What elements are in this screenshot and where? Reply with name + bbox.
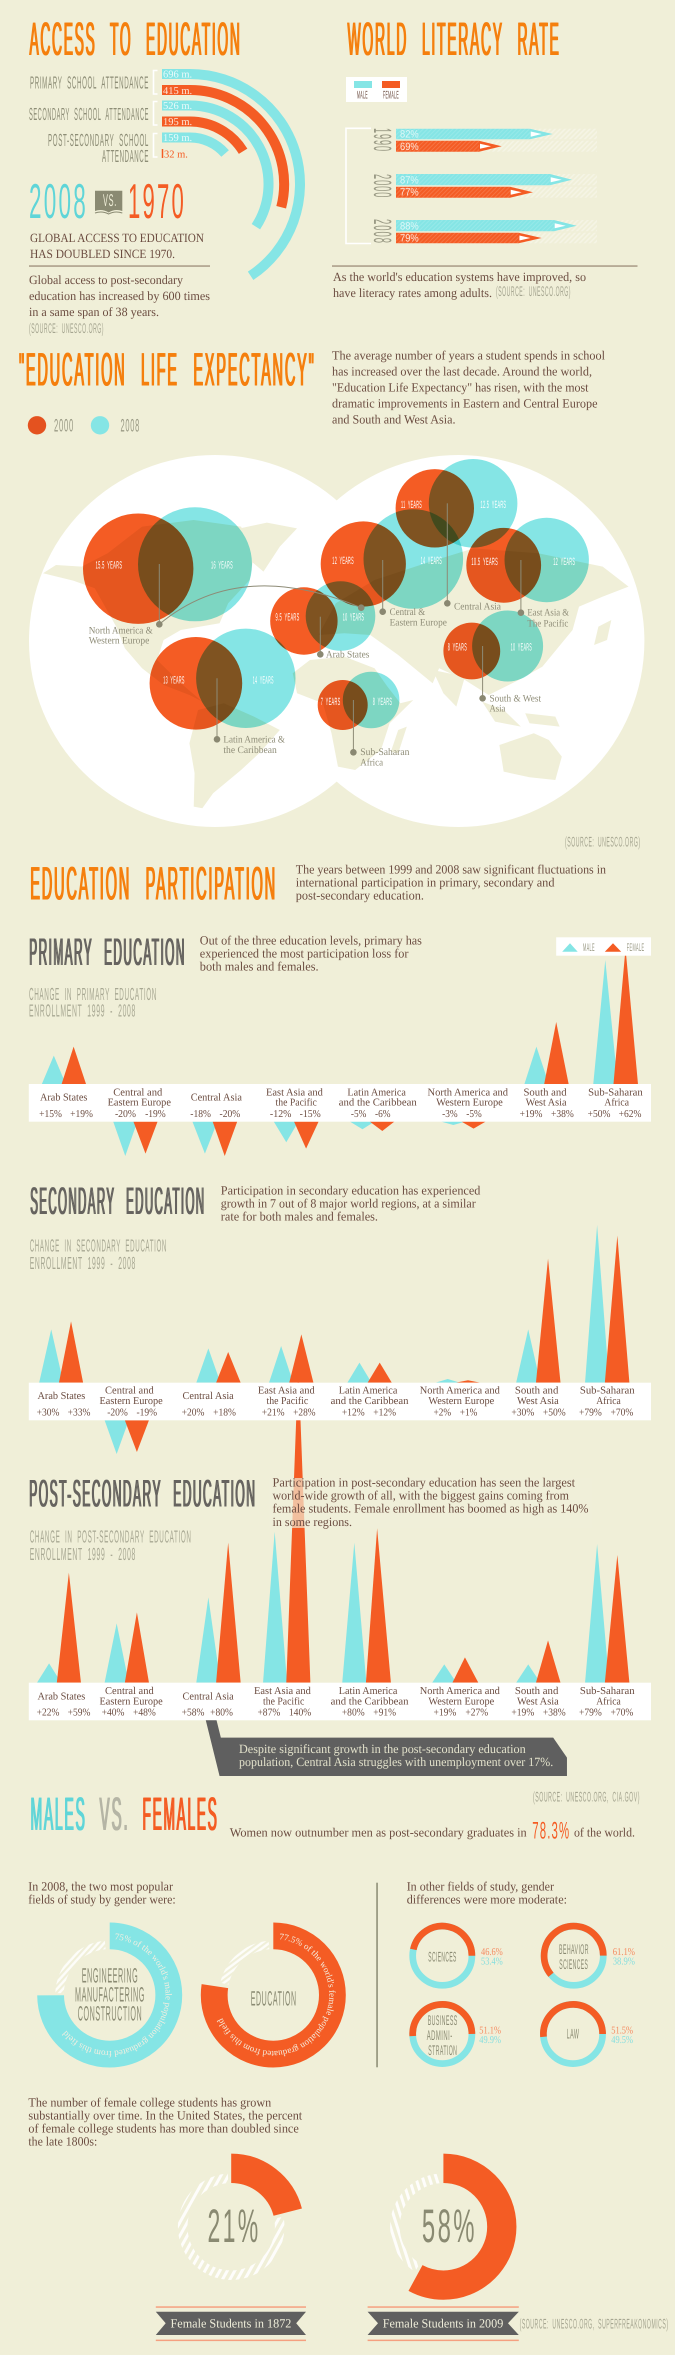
year labels [368,128,396,244]
region labels and values: Eastern Europe [99,1695,163,1707]
region labels and values: +27% [465,1706,488,1718]
region labels and values: -20% [115,1108,136,1119]
panel: education life expectancy: 12 YEARS [553,556,575,568]
title: VS. [99,1787,129,1840]
region labels: the Caribbean [223,745,277,756]
donut: business administration: STRATION [428,2042,457,2058]
region labels and values: +80% [342,1706,365,1718]
headline text [30,231,204,261]
panel: access to education: PRIMARY SCHOOL ATTENDANCE [30,73,149,93]
circle year values: 10.5 YEARS [471,556,498,568]
circle year values: 8 YEARS [448,642,467,654]
donut: behavior sciences: 38.9% [613,1957,635,1968]
intro text: and South and West Asia. [332,412,456,426]
chart legend [556,937,651,956]
callout: central asia unemployment: population, Central Asia struggles with unemployment over 17%. [239,1755,553,1769]
attendance labels [29,73,149,166]
female college students text: The number of female college students has grown [28,2096,272,2110]
intro left: fields of study by gender were: [28,1892,176,1906]
circle year values: 8 YEARS [373,696,392,708]
panel: secondary education: SECONDARY EDUCATION [30,1180,205,1223]
panel: post-secondary education: CHANGE IN POST-SECONDARY EDUCATION [30,1527,192,1547]
intro left: In 2008, the two most popular [28,1880,174,1894]
intro text: The years between 1999 and 2008 saw significant fluctuations in [296,862,607,876]
panel: world literacy rate: 2008 [368,219,396,244]
region labels and values: -20% [220,1108,240,1119]
panel: secondary education [29,1180,651,1454]
donut: behavior sciences [532,1914,635,1997]
region labels and values: Central Asia [191,1091,242,1103]
region labels and values: +19% [434,1706,456,1718]
region labels and values: -5% [351,1108,366,1119]
donut: 58 percent: 58% [422,2199,477,2252]
region labels: Sub-Saharan [360,747,409,758]
region labels and values: +91% [373,1706,396,1718]
region labels: Africa [360,757,384,768]
legend: 2000 [54,416,74,436]
chart subtitle: ENROLLMENT 1999 - 2008 [30,1544,136,1564]
world continents [43,520,629,808]
female college students text [28,2096,303,2149]
region labels and values: East Asia and [258,1384,315,1396]
donut: behavior sciences: BEHAVIOR [559,1941,589,1957]
panel: world literacy rate: FEMALE [383,90,399,102]
description: Participation in secondary education has experienced [221,1183,481,1197]
region labels: Eastern Europe [390,617,447,628]
donut: business administration: 51.1% [479,2025,501,2036]
region labels and values: Africa [596,1695,621,1707]
panel: access to education: 1970 [128,175,186,229]
description: Participation in post-secondary education has seen the largest [272,1476,576,1490]
region labels and values: +87% [257,1706,280,1718]
region labels and values: -18% [190,1108,211,1119]
donut: engineering: MANUFACTERING [75,1984,145,2007]
arc chart: attendance in millions [162,74,300,276]
region labels and values: -19% [145,1108,166,1119]
region labels and values: and the Caribbean [331,1695,409,1707]
statement: 78.3% [230,1817,635,1844]
region labels and values: South and [523,1086,567,1098]
region labels and values: Sub-Saharan [580,1685,635,1696]
region labels and values: +2% [434,1406,451,1418]
region labels and values: +70% [610,1406,633,1418]
female college students text: of female college students has more than doubled since [28,2122,299,2136]
donut: business administration: 49.9% [479,2035,501,2046]
donut: sciences: 53.4% [481,1957,503,1968]
arc values: 195 m. [163,117,192,128]
description: in some regions. [272,1515,352,1529]
pencil bar chart: 79% [400,233,419,245]
description: growth in 7 out of 8 major world regions, at a similar [221,1196,476,1210]
region labels and values: +70% [610,1706,633,1718]
intro text: international participation in primary, secondary and [296,875,555,889]
region labels and values: +12% [342,1406,365,1418]
pencil bar chart: 87% [400,174,419,186]
region labels and values: -12% [270,1108,291,1119]
panel: education life expectancy [18,343,644,850]
region labels and values: 140% [289,1706,311,1718]
arc values [163,70,192,160]
region labels and values: Arab States [37,1390,85,1401]
body text [29,273,210,319]
region labels and values: +19% [70,1108,93,1119]
panel: education life expectancy: 2008 [120,416,140,436]
donut: 21 percent [173,2168,290,2285]
region labels and values: +28% [293,1406,316,1418]
comparison: 2008 vs 1970: 2008 [29,175,88,229]
region labels and values: Central and [105,1685,154,1696]
year labels: 1990 [368,128,396,152]
panel: secondary education: CHANGE IN SECONDARY EDUCATION [30,1236,167,1256]
body text: education has increased by 600 times [29,289,210,303]
region labels and values: +30% [37,1406,59,1418]
pencil bar chart: 88% [400,220,419,232]
circle year values: 14 YEARS [253,674,274,686]
region labels and values: Central and [105,1384,154,1396]
region labels and values: +50% [588,1108,610,1119]
panel: access to education [29,12,300,336]
callout: central asia unemployment: Despite significant growth in the post-secondary education [239,1742,526,1756]
female college students text: the late 1800s: [28,2135,97,2149]
arc values: 415 m. [163,86,192,97]
region labels and values: +48% [133,1706,156,1718]
region labels and values: North America and [427,1086,508,1098]
region labels and values: the Pacific [266,1395,308,1406]
intro text [332,348,605,426]
region labels and values: East Asia and [254,1685,311,1696]
donut: engineering: 75% of the world's male population graduated from this field [62,1933,172,2058]
donut: behavior sciences: 61.1% [613,1947,635,1958]
description: female students. Female enrollment has boomed as high as 140% [272,1502,589,1516]
body text: in a same span of 38 years. [29,305,159,319]
region labels and values [37,1384,635,1418]
region labels and values: +59% [68,1706,90,1718]
donut: engineering: CONSTRUCTION [78,2003,142,2026]
region labels and values: -6% [375,1108,390,1119]
circle year values: 10 YEARS [511,642,532,654]
donut: sciences [407,1921,503,1991]
pencil bar chart: 77% [400,187,419,199]
region labels and values: +38% [551,1108,574,1119]
donut: education: EDUCATION [251,1988,297,2011]
region labels and values: +80% [210,1706,233,1718]
region labels and values: the Pacific [276,1096,317,1108]
region labels: North America & [89,625,153,636]
region labels and values: +30% [511,1406,534,1418]
arc values: 32 m. [164,150,188,160]
region labels and values: +1% [460,1406,477,1418]
donut: education: 77.5% of the world's female population graduated from this field [216,1934,336,2057]
donut: behavior sciences: SCIENCES [559,1956,588,1972]
chart subtitle [30,1527,192,1564]
legend: MALE [357,90,368,102]
triangle chart [37,1363,629,1683]
region labels and values: +58% [182,1706,204,1718]
icon: open book [95,191,122,214]
description: rate for both males and females. [221,1209,378,1223]
icon: open book: VS. [103,191,117,210]
region labels [89,602,569,768]
panel: males vs females: FEMALES [142,1787,218,1840]
region labels and values: North America and [420,1685,500,1696]
region labels and values: South and [515,1384,558,1396]
region labels and values: +20% [182,1406,204,1418]
region labels: The Pacific [527,618,569,629]
donut: engineering: ENGINEERING [82,1964,138,1987]
panel: access to education: (SOURCE: UNESCO.ORG) [29,320,104,336]
region labels and values: Arab States [40,1091,87,1103]
region labels and values: Latin America [347,1086,406,1098]
region labels: South & West [490,693,541,704]
region labels and values: Sub-Saharan [588,1086,643,1098]
donut: sciences: SCIENCES [428,1949,457,1965]
region labels and values: Africa [596,1395,621,1406]
title: MALES [30,1787,86,1840]
headline text: HAS DOUBLED SINCE 1970. [30,247,175,261]
panel: world literacy rate [332,12,638,300]
pencil bar chart: 82% [400,129,419,141]
region labels: Latin America & [223,735,285,746]
donut: business administration [411,2002,501,2066]
body text and source [333,270,586,300]
region labels and values: Arab States [37,1690,85,1702]
description [221,1183,481,1223]
region labels and values: +38% [543,1706,566,1718]
statement: 78.3%: of the world. [574,1826,635,1840]
brackets [154,70,158,157]
banner: 1872: Female Students in 1872 [170,2316,291,2330]
statement: 78.3%: 78.3% [532,1817,570,1844]
region labels and values: +50% [543,1406,566,1418]
region labels and values [37,1685,635,1718]
donut: engineering [37,1922,182,2068]
year labels: 2000 [368,174,396,198]
circle year values: 13 YEARS [163,674,185,686]
intro left [28,1880,176,1906]
region labels and values: -5% [466,1108,482,1119]
region labels: Central & [390,607,425,618]
circle year values [96,499,575,708]
arc values: 696 m. [163,70,192,80]
panel: post-secondary education [29,1363,651,1776]
region labels and values: +19% [520,1108,542,1119]
arc values: 526 m. [163,101,192,112]
region labels and values: Africa [604,1096,629,1108]
circle year values: 11 YEARS [401,499,422,511]
panel: access to education: ATTENDANCE [102,146,149,166]
region labels and values: and the Caribbean [339,1096,417,1108]
panel: males vs females [28,1787,669,2342]
region labels: Asia [490,704,506,715]
panel: primary education [29,931,651,1156]
region labels and values: +21% [262,1406,285,1418]
region labels: East Asia & [527,608,569,619]
description [200,933,422,973]
circle year values: 14 YEARS [421,555,442,567]
region labels: Central Asia [454,602,502,613]
chart subtitle [30,1236,167,1273]
circle year values: 7 YEARS [321,696,340,708]
region labels and values: Central Asia [183,1690,234,1702]
region labels and values: +79% [579,1406,602,1418]
donut: law [541,2002,633,2066]
region labels and values: +22% [37,1706,59,1718]
region labels and values: East Asia and [266,1086,323,1098]
region labels and values: Eastern Europe [108,1096,171,1108]
chart subtitle: ENROLLMENT 1999 - 2008 [30,1253,136,1273]
region labels and values [39,1086,643,1119]
region labels: Western Europe [89,636,150,647]
region labels and values: +18% [213,1406,236,1418]
region labels and values: Central Asia [183,1390,234,1401]
region labels: Arab States [326,649,369,660]
panel: primary education: CHANGE IN PRIMARY EDUCATION [29,984,157,1004]
region labels and values: Central and [113,1086,162,1098]
region labels and values: +79% [579,1706,602,1718]
region labels and values: Western Europe [428,1695,494,1707]
donut: law: 49.5% [611,2035,633,2046]
chart legend: MALE [583,942,595,954]
banner: 2009: Female Students in 2009 [383,2316,503,2330]
legend [346,77,407,102]
donut: business administration: BUSINESS [428,2012,458,2028]
triangle chart [42,948,638,1156]
pencil bar chart: 69% [400,141,419,153]
region labels and values: -15% [300,1108,321,1119]
description: both males and females. [200,959,319,973]
intro right [407,1880,567,1906]
banner: 1872 [156,2306,306,2341]
donut: law: LAW [567,2026,579,2042]
donut: law: 51.5% [611,2025,633,2036]
region labels and values: West Asia [517,1695,559,1707]
intro text [296,862,607,902]
region labels and values: -20% [107,1406,128,1418]
legend [28,416,140,436]
intro right: In other fields of study, gender [407,1880,555,1894]
region labels and values: Latin America [339,1384,397,1396]
intro text: "Education Life Expectancy" has risen, with the most [332,380,589,394]
region labels and values: Eastern Europe [99,1395,163,1406]
circle year values: 9.5 YEARS [276,612,300,624]
body text and source: As the world's education systems have improved, so [333,270,586,284]
donut: sciences: 46.6% [481,1947,503,1958]
panel: access to education: POST-SECONDARY SCHOOL [48,130,149,150]
panel: primary education: ENROLLMENT 1999 - 2008 [29,1001,136,1021]
region labels and values: Latin America [339,1685,397,1696]
intro text: post-secondary education. [296,888,424,902]
intro text: The average number of years a student spends in school [332,348,605,362]
callout: central asia unemployment [206,1720,567,1776]
chart subtitle [29,984,157,1021]
region labels and values: +15% [39,1108,62,1119]
region labels and values: Sub-Saharan [580,1384,635,1396]
arc values: 159 m. [163,133,192,144]
region labels and values: West Asia [517,1395,559,1406]
region labels and values: +62% [619,1108,641,1119]
donut: business administration: ADMINI- [427,2027,453,2043]
headline text: GLOBAL ACCESS TO EDUCATION [30,231,204,245]
circle year values: 16 YEARS [211,560,233,572]
description: Out of the three education levels, primary has [200,933,422,947]
circle year values: 12 YEARS [332,555,354,567]
statement: 78.3%: Women now outnumber men as post-secondary graduates in [230,1826,527,1840]
region labels and values: South and [515,1685,558,1696]
region labels and values: +33% [68,1406,90,1418]
donut: 58 percent [376,2160,510,2294]
intro text: has increased over the last decade. Around the world, [332,364,592,378]
region labels and values: the Pacific [263,1695,304,1707]
region labels and values: West Asia [526,1096,567,1108]
panel: access to education: SECONDARY SCHOOL ATTENDANCE [29,104,149,124]
map: double hemisphere [29,455,644,827]
description: experienced the most participation loss for [200,946,409,960]
region labels and values: +40% [102,1706,124,1718]
region labels and values: Western Europe [436,1096,503,1108]
region labels and values: -19% [136,1406,157,1418]
circle year values: 12.5 YEARS [480,499,506,511]
female college students text: substantially over time. In the United States, the percent [28,2109,303,2123]
region labels and values: North America and [420,1384,500,1396]
circle year values: 10 YEARS [343,612,364,624]
leaders and dots [156,503,524,756]
region labels and values: +19% [511,1706,534,1718]
region labels and values: and the Caribbean [331,1395,409,1406]
description [272,1476,589,1529]
body text and source: have literacy rates among adults. [333,286,492,300]
pencil bar chart [396,129,597,245]
body text: Global access to post-secondary [29,273,184,287]
description: world-wide growth of all, with the biggest gains coming from [272,1489,569,1503]
panel: primary education: PRIMARY EDUCATION [29,931,185,974]
region labels and values: -3% [442,1108,458,1119]
venn circles: years of school [83,459,589,730]
triangle chart [39,1225,629,1454]
donut: 21 percent: 21% [208,2199,260,2252]
banner: 2009 [368,2306,519,2341]
region labels and values: +12% [373,1406,396,1418]
intro right: differences were more moderate: [407,1892,567,1906]
circle year values: 15.5 YEARS [96,560,122,572]
region labels and values: Western Europe [428,1395,494,1406]
intro text: dramatic improvements in Eastern and Central Europe [332,396,598,410]
